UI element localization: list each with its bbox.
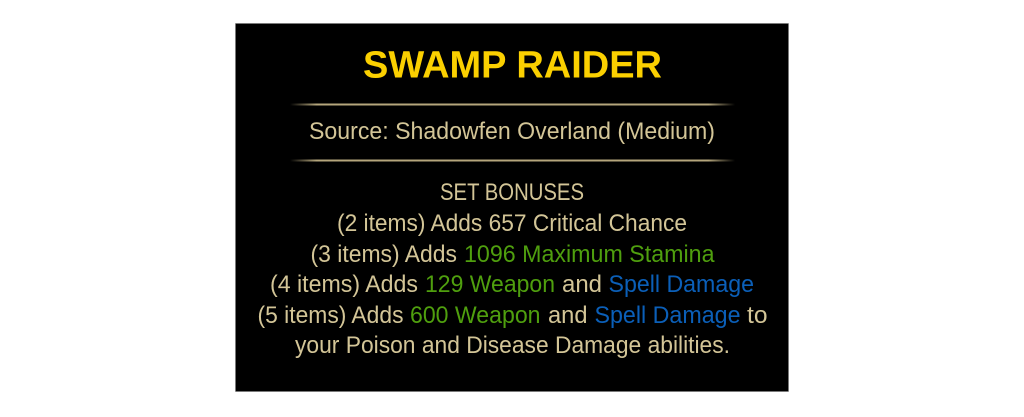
set bonuses block bbox=[258, 179, 768, 359]
2 item bonus: (2 items) Adds 657 Critical Chance bbox=[337, 210, 687, 237]
4 item bonus: (4 items) Adds bbox=[270, 271, 418, 298]
set bonuses heading: SET BONUSES bbox=[440, 179, 584, 206]
top divider bbox=[290, 104, 735, 106]
title: SWAMP RAIDER bbox=[363, 44, 662, 86]
4 item bonus: Spell Damage bbox=[608, 271, 754, 298]
panel: black card background bbox=[236, 24, 788, 392]
4 item bonus: and bbox=[562, 271, 602, 298]
3 item bonus: 1096 Maximum Stamina bbox=[464, 241, 715, 268]
source line: Source: Shadowfen Overland (Medium) bbox=[309, 118, 715, 145]
bottom divider bbox=[290, 160, 735, 162]
5 item bonus continuation: your Poison and Disease Damage abilities. bbox=[295, 332, 730, 359]
5 item bonus: 600 Weapon bbox=[410, 302, 540, 329]
5 item bonus: to bbox=[747, 302, 768, 329]
4 item bonus: 129 Weapon bbox=[425, 271, 555, 298]
5 item bonus bbox=[258, 302, 768, 329]
3 item bonus bbox=[310, 241, 715, 268]
4 item bonus bbox=[270, 271, 754, 298]
5 item bonus: Spell Damage bbox=[594, 302, 740, 329]
5 item bonus: (5 items) Adds bbox=[258, 302, 404, 329]
5 item bonus: and bbox=[548, 302, 588, 329]
3 item bonus: (3 items) Adds bbox=[310, 241, 457, 268]
